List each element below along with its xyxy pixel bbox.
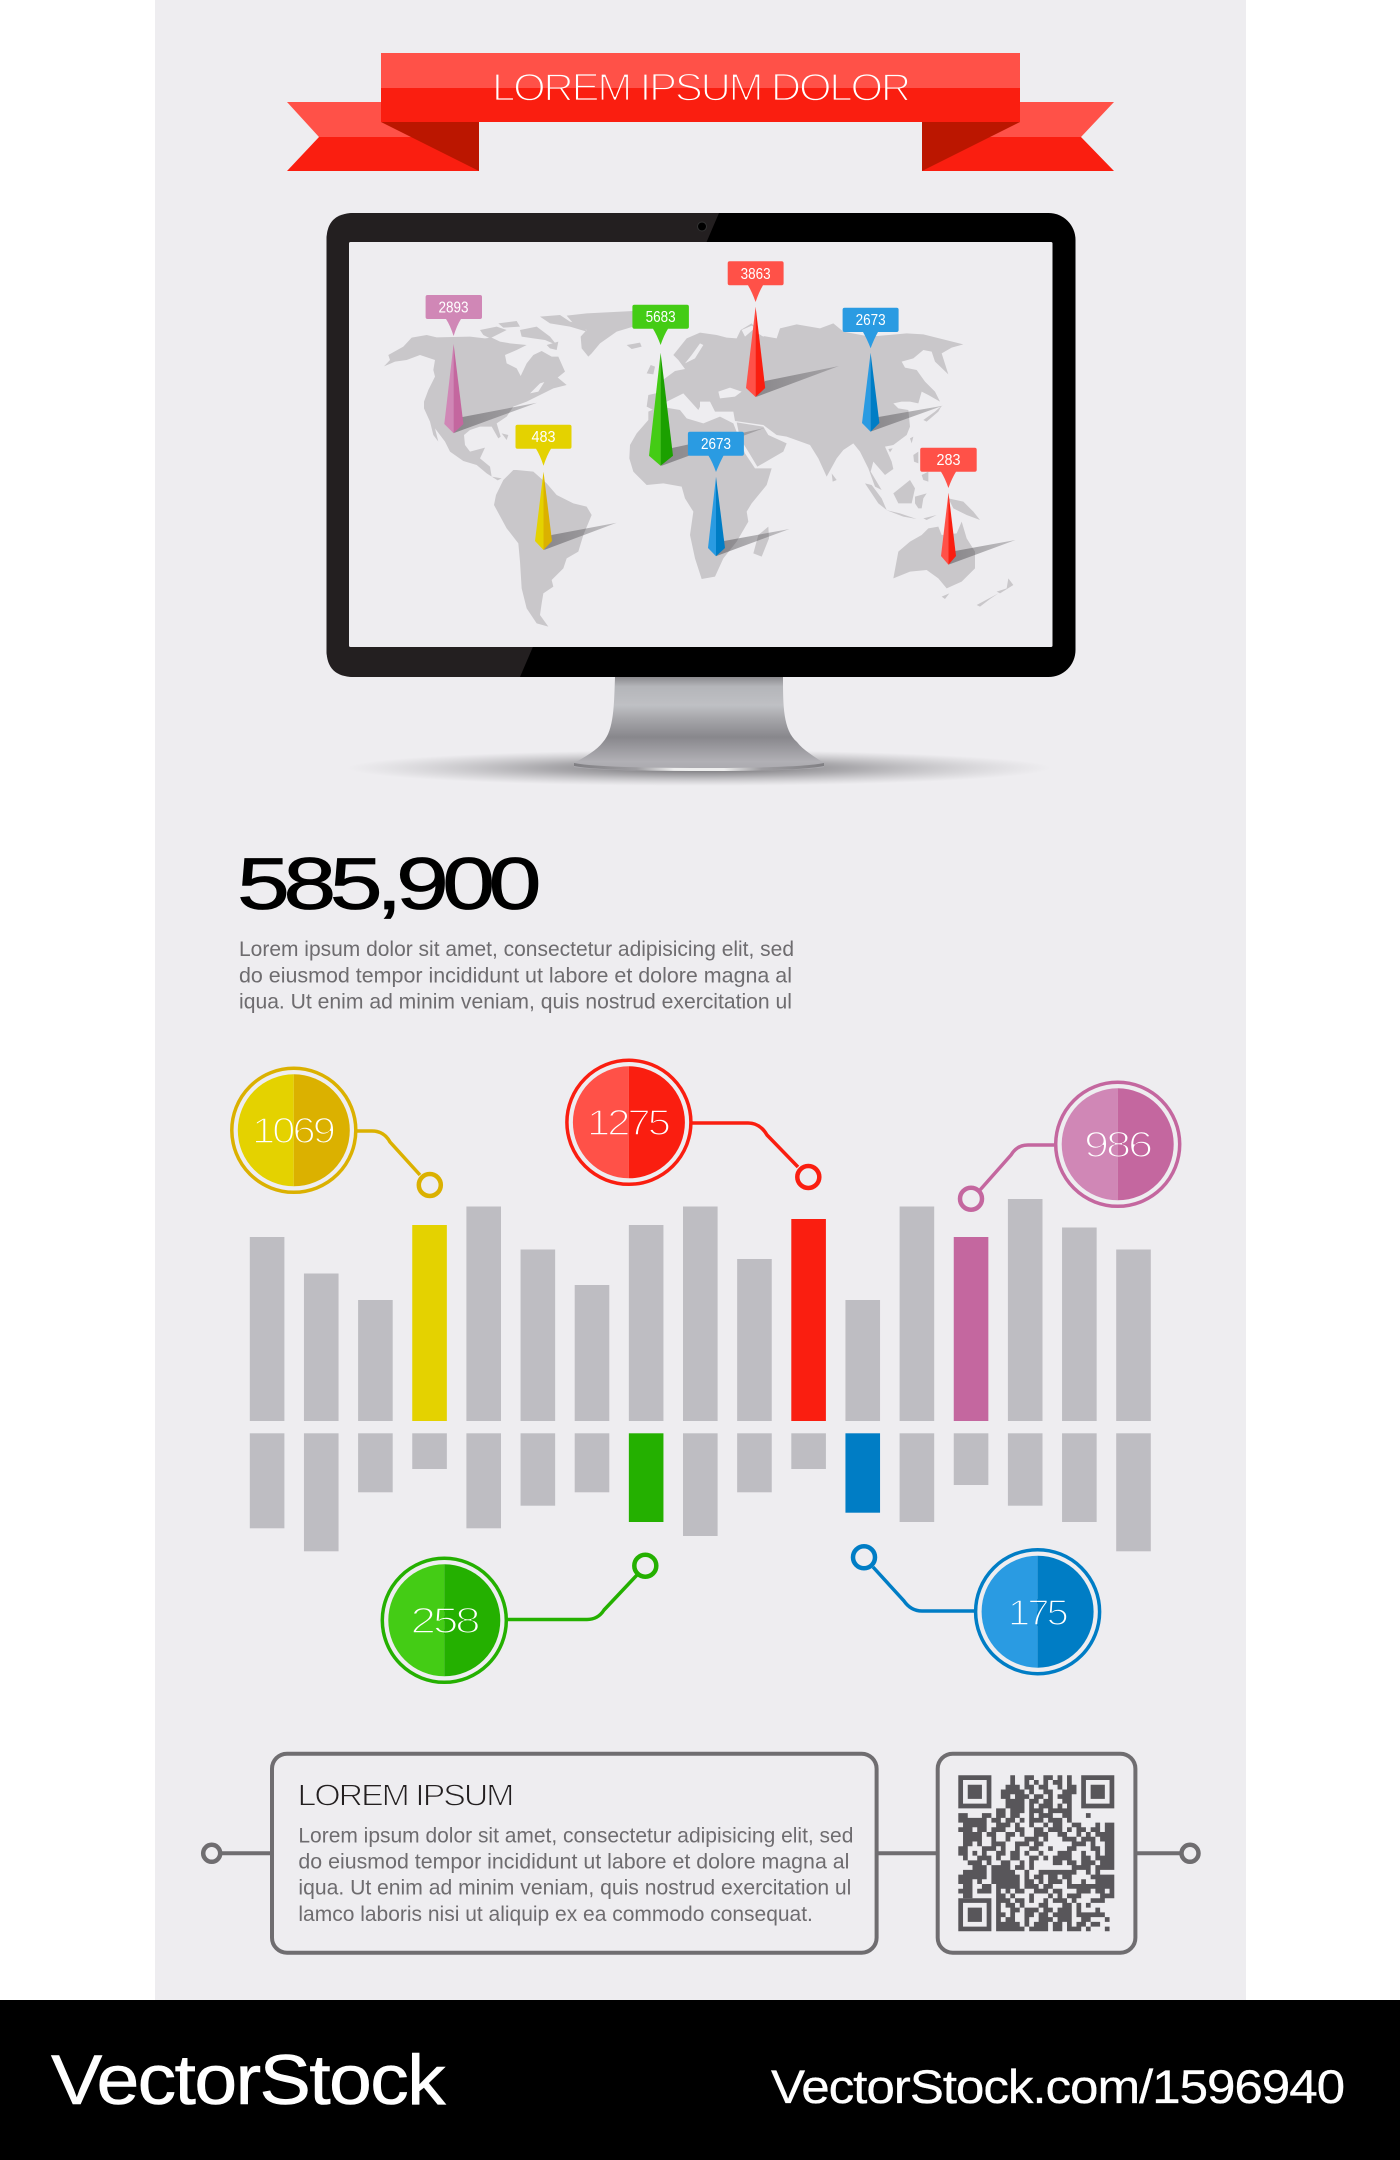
screen (349, 242, 1052, 647)
intro paragraph: iqua. Ut enim ad minim veniam, quis nostrud exercitation ul (239, 991, 792, 1014)
pin: blue 2673 north (843, 308, 943, 432)
ribbon title text: LOREM IPSUM DOLOR (492, 66, 910, 110)
title ribbon (287, 53, 1114, 171)
pin: red 3863: 3863 (741, 266, 771, 283)
intro paragraph: do eiusmod tempor incididunt ut labore et dolore magna al (239, 964, 792, 987)
brand name: VectorStock (51, 2041, 446, 2120)
pin: pink 2893: 2893 (438, 300, 469, 316)
callout: green 258: 258 (410, 1600, 479, 1641)
image reference url: VectorStock.com/1596940 (771, 2060, 1344, 2113)
QR code panel (938, 1754, 1135, 1953)
lower bars (250, 1433, 1151, 1551)
floor shadow (347, 750, 1051, 786)
pin: pink 2893 (426, 295, 537, 433)
watermark footer band (0, 2000, 1400, 2160)
text box panel (272, 1754, 877, 1953)
callout: yellow 1069 (232, 1068, 441, 1196)
text box body: Lorem ipsum dolor sit amet, consectetur adipisicing elit, sed (298, 1825, 853, 1848)
map: east asia and oceania (865, 406, 1013, 607)
text box body: lamco laboris nisi ut aliquip ex ea commodo consequat. (298, 1903, 813, 1926)
text box heading: LOREM IPSUM (298, 1777, 512, 1812)
intro paragraph (239, 938, 794, 1014)
world map (384, 311, 1013, 627)
pin: blue 2673 africa (688, 432, 790, 556)
monitor with world map (326, 213, 1076, 786)
pin: blue 2673 africa: 2673 (701, 436, 731, 453)
pin: yellow 483 (516, 425, 617, 550)
page panel background (155, 0, 1246, 2000)
text box body: iqua. Ut enim ad minim veniam, quis nostrud exercitation ul (298, 1877, 851, 1900)
intro paragraph: Lorem ipsum dolor sit amet, consectetur adipisicing elit, sed (239, 938, 794, 961)
monitor bezel (326, 213, 1076, 677)
pin: yellow 483: 483 (532, 429, 556, 446)
map: americas (384, 311, 642, 627)
callout: green 258 (382, 1555, 656, 1682)
footer connector line (203, 1845, 1198, 1862)
text box body (298, 1825, 853, 1926)
bezel gloss (326, 213, 719, 677)
callout: pink 986 (960, 1082, 1180, 1210)
callout: blue 175 (853, 1546, 1100, 1674)
pin: red 283 (920, 448, 1016, 565)
callout: red 1275: 1275 (587, 1102, 670, 1143)
upper bars (250, 1199, 1151, 1421)
QR code (958, 1775, 1114, 1931)
monitor stand (574, 677, 824, 771)
headline number: 585,900 (237, 844, 538, 925)
map: africa and eurasia (629, 323, 963, 579)
callout: yellow 1069: 1069 (252, 1110, 335, 1151)
pin: blue 2673 north: 2673 (856, 312, 886, 329)
callout: blue 175: 175 (1008, 1592, 1068, 1633)
bar chart (250, 1199, 1151, 1551)
pin: red 283: 283 (936, 452, 961, 469)
pin: green 5683: 5683 (646, 309, 676, 326)
pin: green 5683 (632, 305, 764, 466)
pin: red 3863 (728, 261, 839, 397)
callout: pink 986: 986 (1084, 1124, 1152, 1165)
text box body: do eiusmod tempor incididunt ut labore et dolore magna al (298, 1851, 849, 1874)
webcam (698, 222, 706, 231)
callout: red 1275 (567, 1060, 819, 1188)
